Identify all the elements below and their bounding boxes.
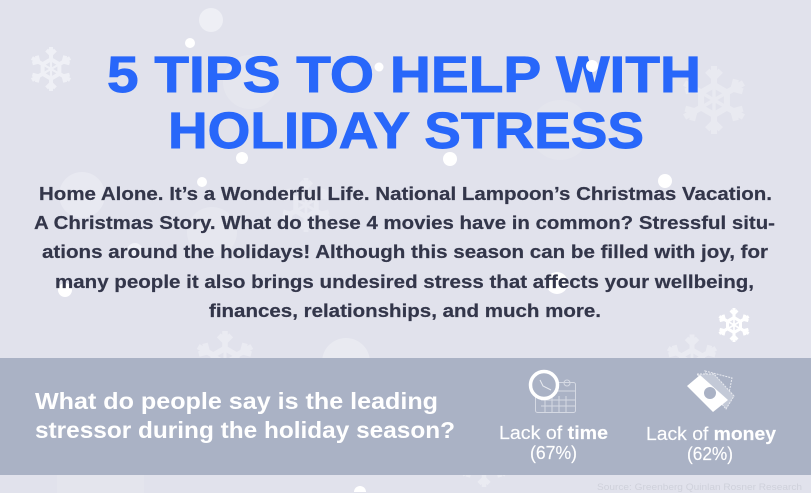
stat banner: [0, 358, 811, 475]
intro paragraph: [34, 184, 775, 321]
source note: Source: Greenberg Quinlan Rosner Research: [597, 482, 802, 493]
stat: lack of money: [646, 424, 776, 464]
intro paragraph: Home Alone. It’s a Wonderful Life. National Lampoon’s Christmas Vacation.: [39, 184, 772, 204]
title: 5 TIPS TO HELP WITH: [107, 46, 701, 103]
intro paragraph: A Christmas Story. What do these 4 movies have in common? Stressful situ-: [34, 213, 775, 233]
intro paragraph: ations around the holidays! Although this season can be filled with joy, for: [42, 242, 768, 262]
intro paragraph: many people it also brings undesired stress that affects your wellbeing,: [55, 272, 754, 292]
title: [107, 46, 701, 159]
snow dots over title: [374, 60, 598, 72]
banner question: [35, 388, 455, 443]
icon: money: [687, 371, 734, 412]
intro paragraph: finances, relationships, and much more.: [209, 301, 601, 321]
banner question: stressor during the holiday season?: [35, 417, 455, 443]
stat: lack of time: Lack of time: [499, 423, 608, 443]
stat: lack of money: (62%): [687, 444, 733, 464]
icon: clock and calendar: [530, 372, 576, 412]
stat: lack of time: [499, 423, 608, 463]
title: HOLIDAY STRESS: [168, 102, 644, 159]
stat: lack of time: (67%): [530, 443, 577, 463]
stat: lack of money: Lack of money: [646, 424, 776, 444]
banner question: What do people say is the leading: [35, 388, 438, 414]
banner background: [0, 358, 811, 475]
